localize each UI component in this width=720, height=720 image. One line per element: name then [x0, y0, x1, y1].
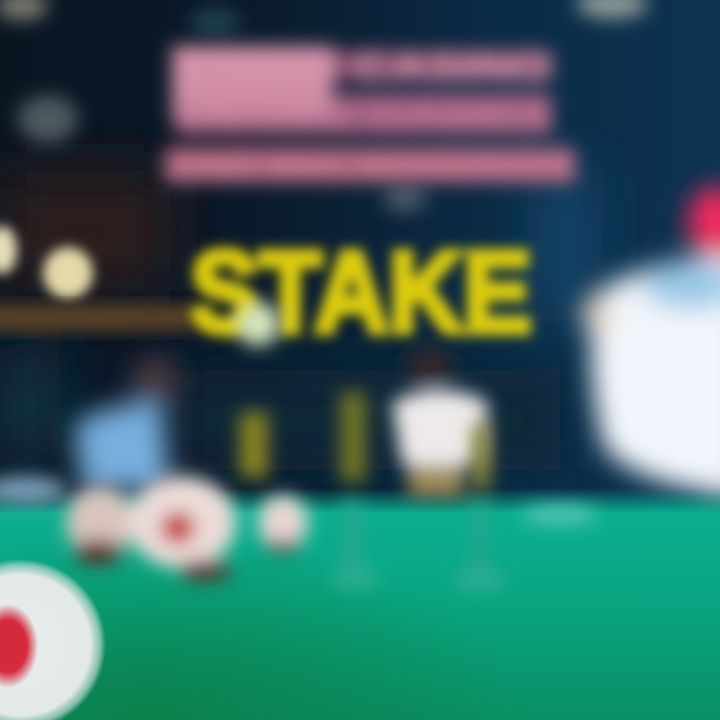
background glows	[0, 170, 585, 470]
player right	[392, 347, 488, 497]
heading: pink title: STAKE CASINO	[172, 47, 552, 89]
big yellow word: STAKE	[190, 227, 532, 357]
foreground ball	[0, 560, 106, 720]
footballs	[66, 476, 308, 580]
ball on word	[236, 302, 280, 346]
mascot: white figure with red cap	[582, 186, 720, 570]
heading: pink title: AND BIG WINNINGS	[165, 148, 575, 184]
heading: pink title: BONUS GAMES	[172, 97, 552, 135]
player left	[74, 356, 179, 490]
ceiling lights	[0, 0, 648, 212]
floor	[0, 488, 720, 720]
floor highlights	[0, 476, 598, 590]
wall lamps	[0, 226, 93, 299]
trophies	[240, 392, 490, 490]
shelf	[0, 306, 195, 330]
floor shade lower left	[0, 530, 530, 720]
heading: pink title	[165, 46, 575, 184]
